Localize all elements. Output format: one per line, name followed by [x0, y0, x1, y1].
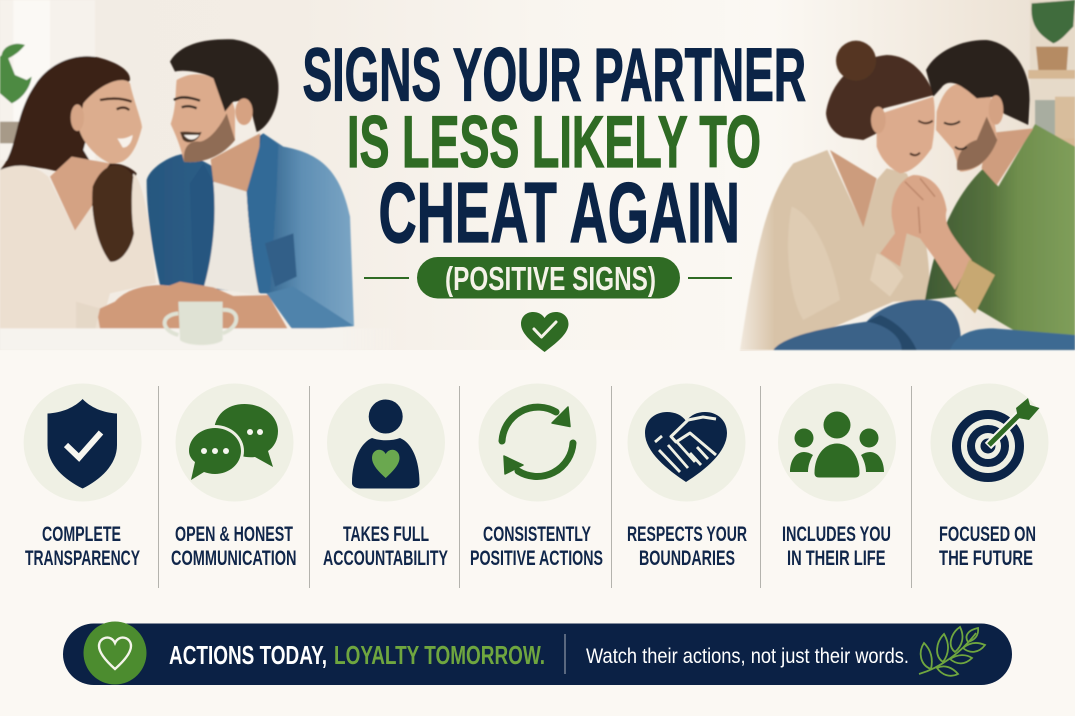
sign: includes you in their life: IN THEIR LIFE	[787, 547, 886, 570]
sign: takes full accountability: TAKES FULL	[343, 523, 429, 546]
sign: consistently positive actions: CONSISTENTLY	[483, 523, 591, 546]
icon: shield with check	[48, 399, 117, 488]
subtitle pill	[364, 257, 732, 298]
sign: complete transparency: TRANSPARENCY	[25, 547, 140, 570]
sign: complete transparency	[24, 384, 142, 570]
sign: takes full accountability: ACCOUNTABILITY	[323, 547, 448, 570]
bottom banner: ACTIONS TODAY,	[169, 640, 327, 670]
sign: respects your boundaries: RESPECTS YOUR	[627, 523, 747, 546]
bottom banner: Watch their actions, not just their words.	[586, 645, 909, 668]
title	[302, 32, 806, 261]
icon: person with heart	[352, 400, 420, 488]
subtitle pill: (POSITIVE SIGNS)	[445, 260, 656, 297]
icon: heart with check	[521, 312, 568, 352]
title: CHEAT AGAIN	[378, 166, 740, 261]
title: IS LESS LIKELY TO	[347, 102, 761, 183]
sign: includes you in their life: INCLUDES YOU	[782, 523, 891, 546]
sign: respects your boundaries	[627, 384, 747, 570]
divider lines between signs	[158, 386, 912, 588]
sign: focused on the future: THE FUTURE	[939, 547, 1033, 570]
icon: target with arrow	[956, 398, 1040, 478]
sign: consistently positive actions	[470, 384, 603, 570]
sign: open and honest communication	[171, 384, 296, 570]
photo: couple touching foreheads	[740, 0, 1075, 350]
sign: complete transparency: COMPLETE	[42, 523, 121, 546]
sign: includes you in their life	[778, 384, 896, 570]
icon: chat bubbles	[186, 404, 278, 480]
sign: open and honest communication: OPEN & HONEST	[175, 523, 293, 546]
icon: heart in green circle	[84, 622, 146, 684]
icon: group of people	[790, 412, 884, 478]
bottom banner	[63, 622, 1012, 685]
sign: respects your boundaries: BOUNDARIES	[639, 547, 735, 570]
bottom banner: LOYALTY TOMORROW.	[334, 640, 545, 670]
icon: cycle arrows	[502, 407, 573, 476]
sign: consistently positive actions: POSITIVE ACTIONS	[470, 547, 603, 570]
sign: focused on the future: FOCUSED ON	[939, 523, 1036, 546]
photo: couple talking at table	[0, 0, 397, 350]
hero background	[0, 0, 1075, 350]
sign: takes full accountability	[323, 384, 448, 570]
icon: leaf sprig	[919, 627, 985, 676]
icon: heart with handshake	[645, 412, 727, 482]
sign: focused on the future	[930, 384, 1048, 570]
photo fade: left edge of right couple	[725, 0, 775, 350]
sign: open and honest communication: COMMUNICATION	[171, 547, 296, 570]
